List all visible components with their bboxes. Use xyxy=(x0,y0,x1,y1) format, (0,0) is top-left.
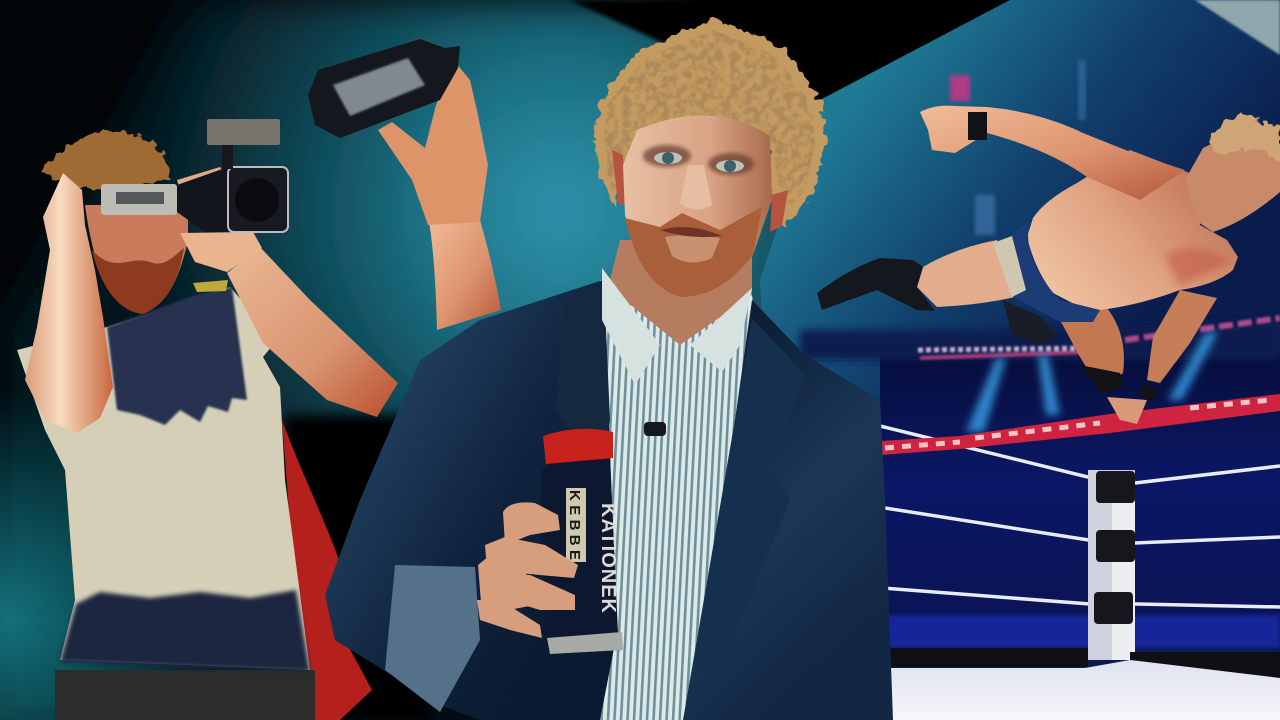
jacket left xyxy=(325,280,617,720)
red banner rope xyxy=(881,394,1280,455)
chin patch xyxy=(665,235,720,263)
lapel left xyxy=(555,285,610,470)
background: black diagonal top band xyxy=(570,0,1010,100)
t-shirt navy bottom xyxy=(60,590,310,672)
hand xyxy=(378,62,488,225)
hand xyxy=(477,502,578,638)
wrestler front leg xyxy=(1060,308,1124,390)
t-shirt xyxy=(17,287,310,670)
arena backdrop xyxy=(760,0,1280,720)
bottle: KEBBE xyxy=(566,490,583,560)
ring apron xyxy=(888,648,1280,678)
crowd xyxy=(880,350,1280,650)
camcorder xyxy=(308,39,460,138)
wrestler rear leg xyxy=(917,240,1015,307)
face xyxy=(85,205,188,313)
shirt xyxy=(595,280,770,720)
bottle: KATIONEK xyxy=(597,503,619,614)
left arm on head xyxy=(25,173,113,433)
wrestler raised arm xyxy=(920,106,1185,200)
bottle xyxy=(541,429,623,654)
ring ropes xyxy=(880,426,1280,607)
lapel right xyxy=(695,318,805,690)
camera arm xyxy=(227,247,398,417)
wrestler hair xyxy=(1210,112,1280,165)
nose xyxy=(680,165,712,210)
spotlights xyxy=(966,332,1218,432)
left eye xyxy=(643,145,691,167)
t-shirt navy top xyxy=(107,287,247,425)
neck xyxy=(605,240,752,370)
ring xyxy=(780,394,1280,720)
stage light strip xyxy=(918,318,1280,358)
chest shadow xyxy=(1165,248,1230,286)
wrestler torso xyxy=(1027,150,1238,310)
cameraman xyxy=(17,119,398,720)
bottle label xyxy=(566,488,586,562)
collar xyxy=(602,268,752,385)
ring mat xyxy=(780,660,1280,720)
trousers xyxy=(55,670,315,720)
right eye xyxy=(708,153,754,175)
head xyxy=(623,115,772,297)
curly hair xyxy=(595,18,825,227)
collar gold xyxy=(193,280,228,292)
wrestler xyxy=(817,106,1280,424)
hair xyxy=(43,132,172,190)
beard xyxy=(92,248,184,314)
lips xyxy=(660,227,722,237)
wrestler boot xyxy=(817,258,935,311)
ears xyxy=(612,150,788,232)
camera xyxy=(101,119,288,232)
wrestler head xyxy=(1185,130,1280,232)
beard xyxy=(625,207,762,297)
jacket right xyxy=(683,300,893,720)
red cape xyxy=(282,420,372,720)
cuff xyxy=(385,565,480,712)
arena corner light xyxy=(1195,0,1280,55)
background: teal glow behind figures xyxy=(0,0,830,720)
forearm xyxy=(428,215,501,330)
ring post xyxy=(1088,470,1135,660)
central man xyxy=(325,18,893,720)
microphone xyxy=(644,422,666,436)
raised arm with camcorder xyxy=(308,39,501,330)
wrestler lower arm xyxy=(1147,290,1217,383)
crowd lower glow xyxy=(885,615,1280,648)
wrestler trunks xyxy=(997,220,1100,322)
